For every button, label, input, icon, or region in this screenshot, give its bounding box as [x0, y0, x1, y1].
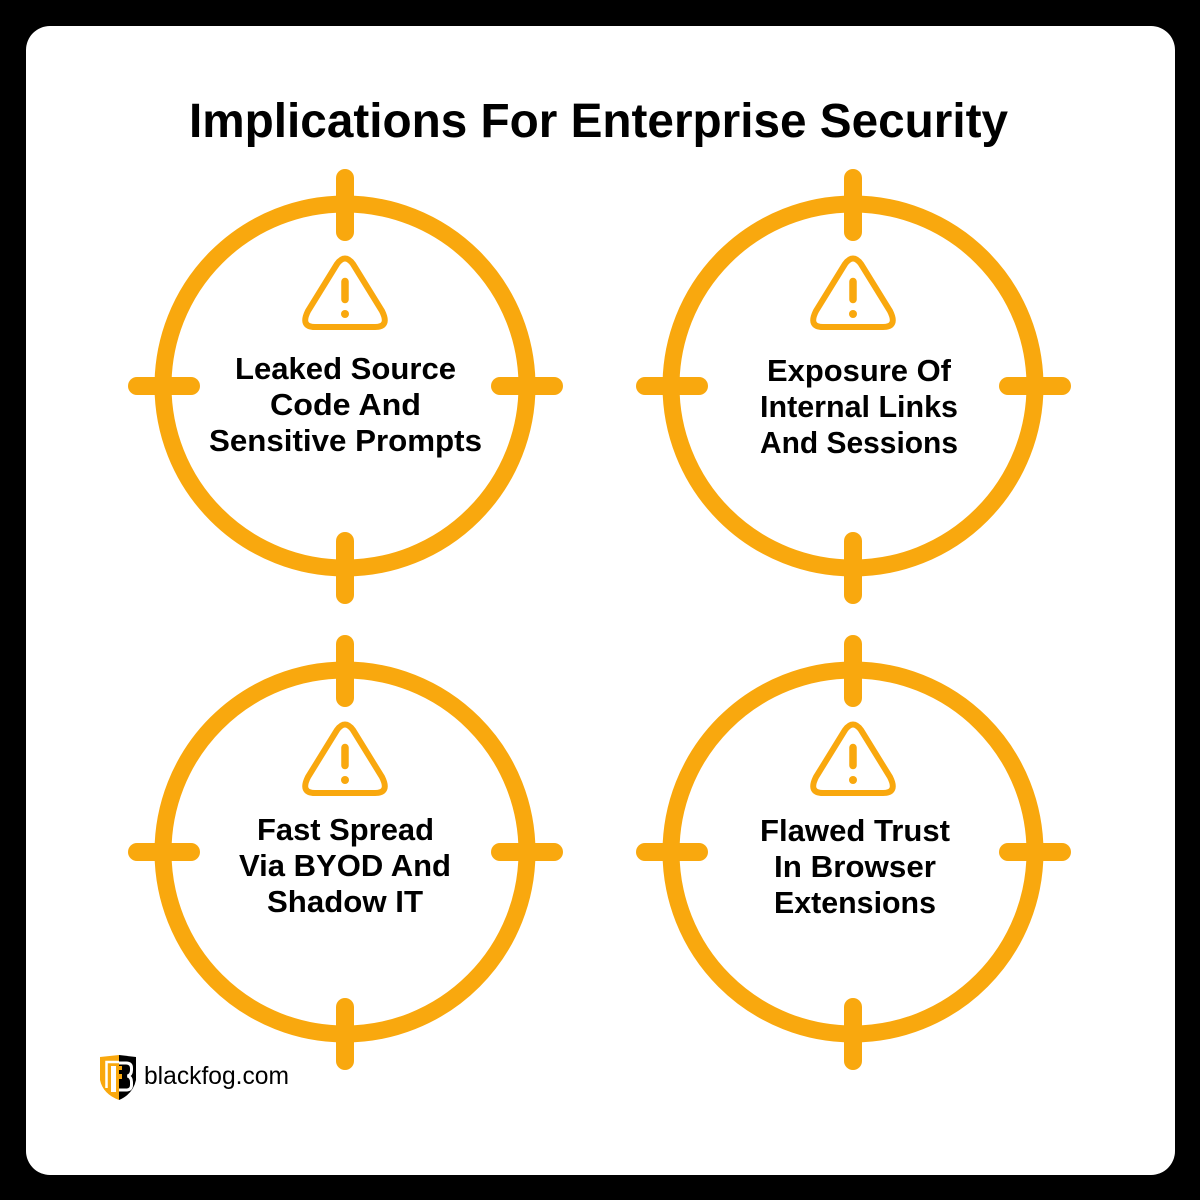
text: fast spread via BYOD and shadow IT: Fast Spread [257, 812, 434, 847]
icon: target ring with warning triangle [645, 644, 1062, 1061]
text: fast spread via BYOD and shadow IT [239, 812, 451, 919]
panel: leaked source code [137, 178, 554, 595]
text: leaked source code and sensitive prompts: Sensitive Prompts [209, 423, 482, 458]
icon: target ring with warning triangle [645, 178, 1062, 595]
text: flawed trust in browser extensions: Extensions [774, 885, 936, 920]
icon: target ring with warning triangle [137, 178, 554, 595]
text: flawed trust in browser extensions [760, 813, 950, 920]
brand text: blackfog.com [144, 1062, 289, 1090]
text: exposure of internal links and sessions: Exposure Of [767, 353, 952, 388]
text: exposure of internal links and sessions: Internal Links [760, 389, 958, 424]
icon: target ring with warning triangle [137, 644, 554, 1061]
icon: shield [100, 1055, 136, 1100]
title: Implications For Enterprise Security [189, 95, 1008, 148]
text: leaked source code and sensitive prompts: Leaked Source [235, 351, 456, 386]
text: fast spread via BYOD and shadow IT: Via BYOD And [239, 848, 451, 883]
text: leaked source code and sensitive prompts [209, 351, 482, 458]
text: exposure of internal links and sessions: And Sessions [760, 425, 958, 460]
panel: fast spread [137, 644, 554, 1061]
text: exposure of internal links and sessions [760, 353, 958, 460]
text: fast spread via BYOD and shadow IT: Shadow IT [267, 884, 423, 919]
logo: blackfog.com [100, 1055, 289, 1100]
panel: exposure of internal links [645, 178, 1062, 595]
text: flawed trust in browser extensions: Flawed Trust [760, 813, 950, 848]
text: flawed trust in browser extensions: In Browser [774, 849, 936, 884]
panel: flawed trust [645, 644, 1062, 1061]
text: leaked source code and sensitive prompts: Code And [270, 387, 421, 422]
